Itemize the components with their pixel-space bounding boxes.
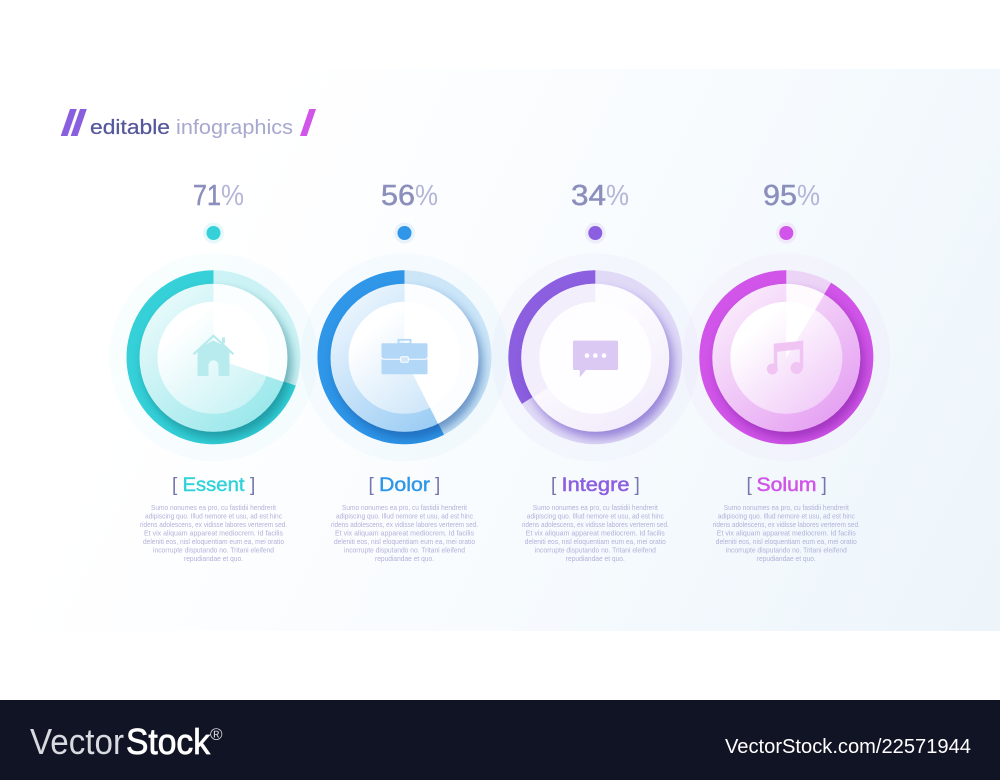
label: Integre: ] bbox=[634, 475, 640, 496]
description text: Et vix aliquam appareat mediocrem. Id facilis bbox=[717, 528, 856, 537]
description text: incorrupte disputando no. Tritani eleifend bbox=[153, 545, 274, 554]
registered mark: ® bbox=[210, 725, 223, 744]
label: Solum: [ bbox=[746, 475, 752, 496]
label: Integre: [ bbox=[551, 475, 557, 496]
label: Integre: Integre bbox=[562, 475, 630, 496]
description text: Sumo nonumes ea pro, cu fastidii hendrerit bbox=[151, 503, 276, 512]
description text: Et vix aliquam appareat mediocrem. Id facilis bbox=[335, 528, 474, 537]
description text: adipiscing quo. Illud nemore et usu, ad est hinc bbox=[527, 512, 664, 520]
marker dot bbox=[776, 222, 797, 244]
percentage: 56%: % bbox=[415, 180, 438, 212]
label: Dolor: [ bbox=[368, 475, 374, 496]
description text bbox=[140, 503, 287, 563]
footer logo: VectorStock: Vector bbox=[30, 721, 124, 762]
description text: Sumo nonumes ea pro, cu fastidii hendrerit bbox=[342, 503, 467, 512]
description text: incorrupte disputando no. Tritani eleifend bbox=[535, 545, 656, 554]
label: Dolor: Dolor bbox=[379, 475, 431, 496]
label: Essent: ] bbox=[250, 475, 255, 496]
description text: ridens adolescens, ex vidisse labores verterem sed. bbox=[140, 520, 287, 529]
description text: Et vix aliquam appareat mediocrem. Id facilis bbox=[526, 528, 665, 537]
icon: briefcase bbox=[382, 340, 428, 374]
donut chart: 34% bbox=[508, 270, 682, 444]
description text: repudiandae et quo. bbox=[757, 554, 816, 563]
description text: incorrupte disputando no. Tritani eleifend bbox=[344, 545, 465, 554]
description text bbox=[522, 503, 669, 563]
percentage: 95%: 95 bbox=[763, 180, 797, 212]
description text: deleniti eos, nisl eloquentiam eum ea, mei oratio bbox=[525, 537, 666, 546]
donut chart: 71% bbox=[126, 270, 300, 444]
percentage: 34%: 34 bbox=[571, 180, 606, 212]
description text: Sumo nonumes ea pro, cu fastidii hendrerit bbox=[533, 503, 658, 512]
heading: editable infographics: infographics bbox=[176, 116, 293, 139]
panel: Solum 95% bbox=[699, 184, 874, 562]
description text: repudiandae et quo. bbox=[184, 554, 243, 563]
panel: Integre 34% bbox=[508, 184, 682, 562]
description text: adipiscing quo. Illud nemore et usu, ad est hinc bbox=[718, 512, 855, 520]
description text: ridens adolescens, ex vidisse labores verterem sed. bbox=[522, 520, 669, 529]
description text bbox=[713, 503, 860, 563]
percentage: 71%: % bbox=[221, 180, 244, 212]
marker dot bbox=[203, 222, 224, 244]
percentage: 56%: 56 bbox=[381, 180, 415, 212]
label: Essent: Essent bbox=[182, 475, 245, 496]
description text: ridens adolescens, ex vidisse labores verterem sed. bbox=[331, 520, 478, 529]
description text: Sumo nonumes ea pro, cu fastidii hendrerit bbox=[724, 503, 849, 512]
label: Solum: Solum bbox=[756, 475, 816, 496]
description text: Et vix aliquam appareat mediocrem. Id facilis bbox=[144, 528, 283, 537]
icon: speech bubble bbox=[573, 341, 618, 377]
marker dot bbox=[394, 222, 415, 244]
footer logo: VectorStock: Stock bbox=[126, 721, 211, 762]
marker dot bbox=[585, 222, 606, 244]
label: Dolor: ] bbox=[435, 475, 440, 496]
description text: repudiandae et quo. bbox=[566, 554, 625, 563]
footer band bbox=[0, 700, 1000, 780]
description text: repudiandae et quo. bbox=[375, 554, 434, 563]
description text: incorrupte disputando no. Tritani eleifend bbox=[726, 545, 847, 554]
description text: ridens adolescens, ex vidisse labores verterem sed. bbox=[713, 520, 860, 529]
title bbox=[61, 109, 316, 139]
background panel bbox=[0, 69, 1000, 631]
percentage: 34%: % bbox=[606, 180, 629, 212]
donut chart: 56% bbox=[317, 270, 492, 444]
description text: deleniti eos, nisl eloquentiam eum ea, mei oratio bbox=[143, 537, 284, 546]
description text: deleniti eos, nisl eloquentiam eum ea, mei oratio bbox=[716, 537, 857, 546]
donut chart: 95% bbox=[699, 270, 874, 444]
description text: adipiscing quo. Illud nemore et usu, ad est hinc bbox=[336, 512, 473, 520]
label: Essent: [ bbox=[172, 475, 178, 496]
icon: music note bbox=[767, 341, 803, 374]
percentage: 95%: % bbox=[797, 180, 820, 212]
panel: Essent 71% bbox=[126, 184, 300, 562]
label: Solum: ] bbox=[822, 475, 827, 496]
percentage: 71%: 71 bbox=[193, 180, 221, 212]
panel: Dolor 56% bbox=[317, 184, 492, 562]
description text: adipiscing quo. Illud nemore et usu, ad est hinc bbox=[145, 512, 282, 520]
heading: editable infographics: editable bbox=[90, 116, 170, 139]
description text bbox=[331, 503, 478, 563]
icon: magenta slash bbox=[300, 109, 316, 136]
footer image id: VectorStock.com/22571944 bbox=[725, 736, 971, 758]
description text: deleniti eos, nisl eloquentiam eum ea, mei oratio bbox=[334, 537, 475, 546]
icon: purple slashes bbox=[61, 109, 87, 136]
icon: house bbox=[194, 336, 234, 376]
